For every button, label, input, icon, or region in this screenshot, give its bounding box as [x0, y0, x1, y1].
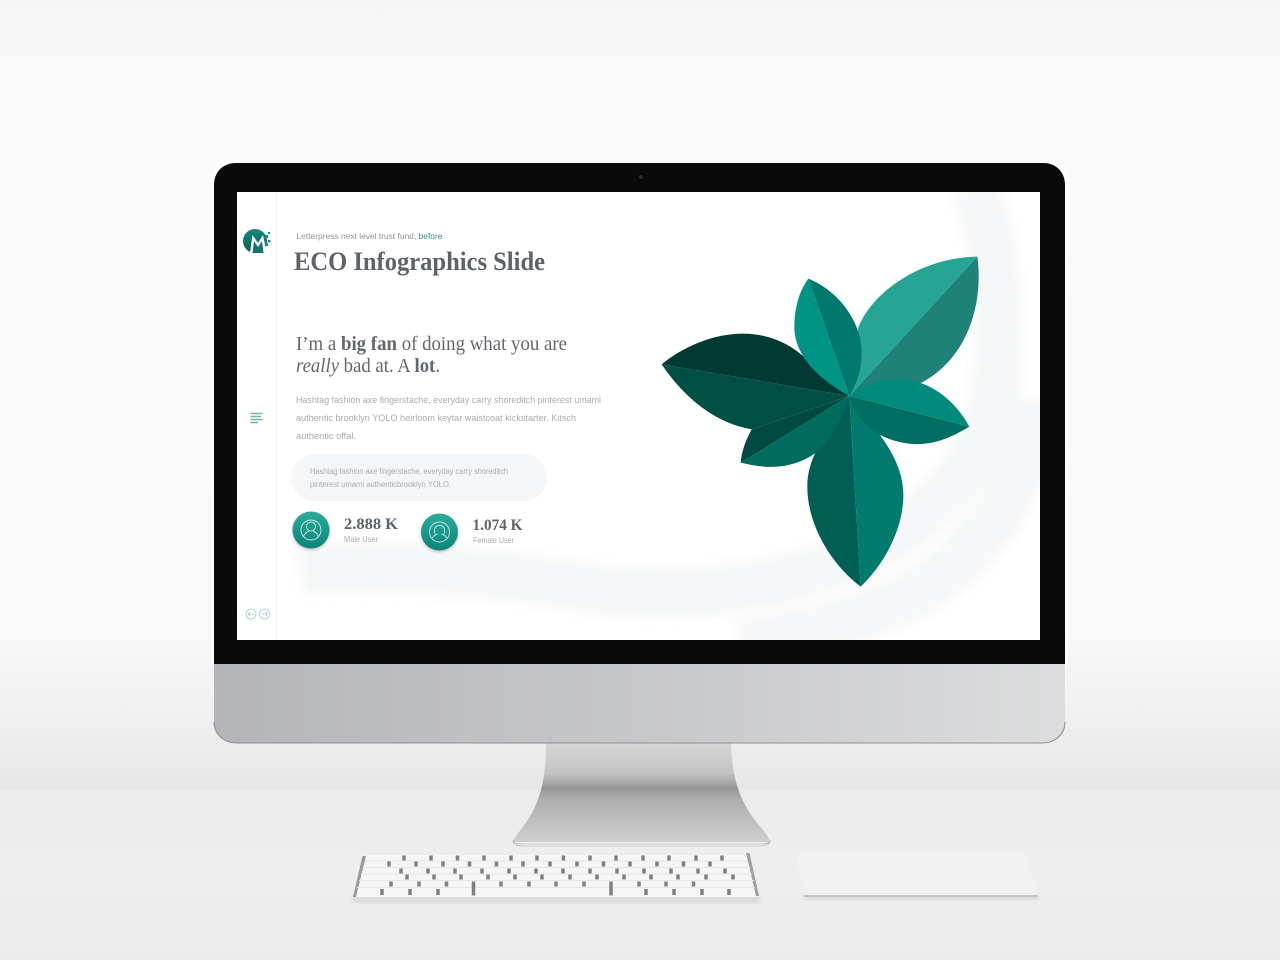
leaf: top [794, 279, 862, 396]
trackpad [797, 852, 1038, 900]
icon: female user [430, 522, 450, 542]
leaf: left [662, 334, 849, 429]
stat: female user: 1.074 K [472, 517, 522, 534]
stat: male user: Male User [344, 535, 378, 544]
monitor body [211, 160, 1068, 743]
keyboard [353, 853, 759, 903]
icon: navigation arrows [246, 609, 270, 619]
body paragraph: authentic offal. [296, 431, 356, 441]
eyebrow text: Letterpress next level trust fund, before [296, 231, 443, 241]
camera [639, 175, 643, 179]
body paragraph: authentic brooklyn YOLO heirloom keytar waistcoat kickstarter. Kitsch [296, 413, 576, 423]
icon: menu [250, 414, 262, 422]
chart: leaf illustration [662, 257, 979, 587]
decorative swirl [300, 185, 1040, 645]
leaf: top right [849, 257, 979, 396]
key gaps [357, 861, 755, 888]
monitor stand [513, 743, 770, 846]
body paragraph [296, 395, 601, 441]
title: ECO Infographics Slide [294, 246, 545, 276]
body paragraph: Hashtag fashion axe fingerstache, everyday carry shoreditch pinterest umami [296, 395, 601, 405]
stat: male user [292, 512, 398, 550]
callout [291, 454, 547, 501]
stat: female user: Female User [473, 536, 514, 545]
callout: pinterest umami authenticbrooklyn YOLO. [310, 480, 451, 489]
headline: really bad at. A lot. [296, 356, 440, 377]
leaf: right [849, 379, 969, 444]
callout: Hashtag fashion axe fingerstache, everyday carry shoreditch [310, 467, 508, 476]
icon: male user [301, 520, 321, 540]
logo [243, 229, 270, 254]
stat: male user: 2.888 K [344, 516, 398, 533]
stat: female user [421, 514, 522, 552]
headline [296, 334, 567, 377]
headline: I’m a big fan of doing what you are [296, 334, 567, 355]
leaf: lower left [741, 396, 849, 467]
slide screen [237, 185, 1040, 645]
leaf: bottom [807, 396, 903, 587]
